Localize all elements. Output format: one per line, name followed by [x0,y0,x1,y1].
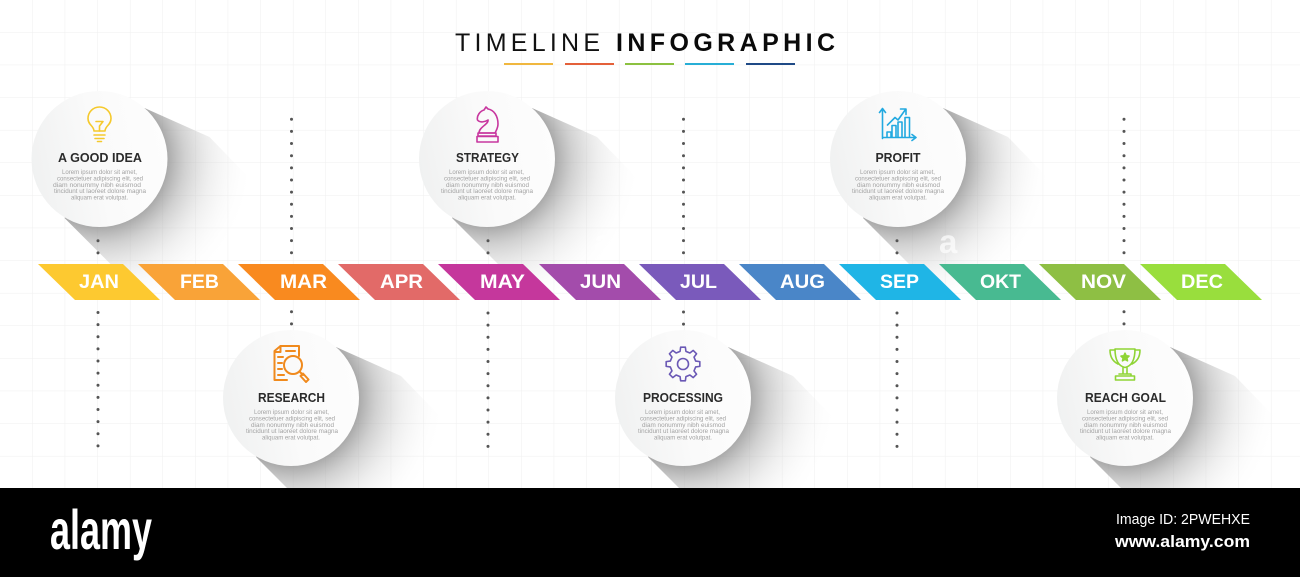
panel: research [223,330,359,466]
body text: tincidunt ut laoreet dolore magna [1080,429,1172,435]
heading: STRATEGY [456,151,520,165]
month: FEB: FEB [180,272,219,293]
panel: reach goal [1057,330,1193,466]
heading: A GOOD IDEA [58,151,142,165]
body text: consectetuer adipiscing elit, sed [855,176,941,182]
body text: diam nonummy nibh euismod [53,183,141,189]
body text: Lorem ipsum dolor sit amet, [62,170,137,176]
title: INFOGRAPHIC [616,29,835,57]
month: NOV: NOV [1081,272,1126,293]
title [455,29,835,57]
month: JUN [539,264,661,300]
icon: light bulb [88,107,111,142]
body text: consectetuer adipiscing elit, sed [249,416,335,422]
body text: consectetuer adipiscing elit, sed [444,176,530,182]
long shadows behind circles [64,108,1295,533]
month timeline bar [38,264,1262,300]
website: www.alamy.com [1114,533,1250,551]
panel: strategy [419,91,555,227]
icon: chess knight [477,107,498,142]
month: OKT: OKT [980,272,1021,293]
month: MAR: MAR [280,272,327,293]
body text [852,170,945,202]
month: DEC [1140,264,1262,300]
body text: tincidunt ut laoreet dolore magna [246,429,339,435]
month: DEC: DEC [1181,272,1223,293]
month: JUL: JUL [680,272,717,293]
icon: trophy [1110,349,1140,380]
body text: aliquam erat volutpat. [71,196,128,202]
body text [53,170,147,202]
body text: tincidunt ut laoreet dolore magna [54,189,147,195]
body text [638,410,730,442]
month: JUN: JUN [580,272,621,293]
body text: aliquam erat volutpat. [869,196,927,202]
month: FEB [138,264,260,300]
body text: aliquam erat volutpat. [262,436,320,442]
month: JUL [639,264,761,300]
body text: consectetuer adipiscing elit, sed [640,416,726,422]
body text: diam nonummy nibh euismod [251,423,334,429]
month: AUG: AUG [780,272,825,293]
body text: Lorem ipsum dolor sit amet, [860,170,935,176]
body text: diam nonummy nibh euismod [857,183,940,189]
footer band [0,488,1300,577]
month: APR: APR [380,272,423,293]
body text: tincidunt ut laoreet dolore magna [441,189,534,195]
title: TIMELINE [455,29,600,57]
body text: diam nonummy nibh euismod [446,183,529,189]
body text: aliquam erat volutpat. [458,196,516,202]
icon: growth chart [880,108,916,140]
month: NOV [1039,264,1161,300]
body text: Lorem ipsum dolor sit amet, [1087,410,1163,416]
month: SEP: SEP [880,272,919,293]
faint watermark marks: a [939,223,958,260]
heading: PROFIT [876,151,921,165]
body text: Lorem ipsum dolor sit amet, [645,410,720,416]
body text: aliquam erat volutpat. [654,436,712,442]
panel: processing [615,330,751,466]
body text: tincidunt ut laoreet dolore magna [852,189,945,195]
body text: consectetuer adipiscing elit, sed [57,176,143,182]
month: MAR [238,264,360,300]
body text: Lorem ipsum dolor sit amet, [449,170,524,176]
body text: diam nonummy nibh euismod [1084,423,1167,429]
month: APR [338,264,460,300]
month: MAY [438,264,560,300]
panel: profit [830,91,966,227]
icon: document with magnifier [274,346,308,382]
month: JAN: JAN [79,272,119,293]
month: MAY: MAY [480,272,525,293]
body text [1080,410,1172,442]
title colour underlines [504,63,795,65]
faint watermark marks: a [594,223,613,260]
dotted connector lines [98,119,1124,447]
heading: RESEARCH [258,391,325,405]
body text [246,410,339,442]
faint watermark marks [594,223,958,260]
body text: diam nonummy nibh euismod [642,423,725,429]
heading: PROCESSING [643,391,723,405]
body text: consectetuer adipiscing elit, sed [1082,416,1168,422]
image id: Image ID: 2PWEHXE [1116,512,1250,528]
body text: tincidunt ut laoreet dolore magna [638,429,730,435]
heading: REACH GOAL [1085,391,1166,405]
body text [441,170,534,202]
month: JAN [38,264,160,300]
footer logo: alamy [50,498,152,561]
body text: Lorem ipsum dolor sit amet, [254,410,329,416]
icon: gear [666,347,700,381]
month: SEP [839,264,961,300]
month: OKT [939,264,1061,300]
panel: a good idea [32,91,168,227]
body text: aliquam erat volutpat. [1096,436,1154,442]
month: AUG [739,264,861,300]
